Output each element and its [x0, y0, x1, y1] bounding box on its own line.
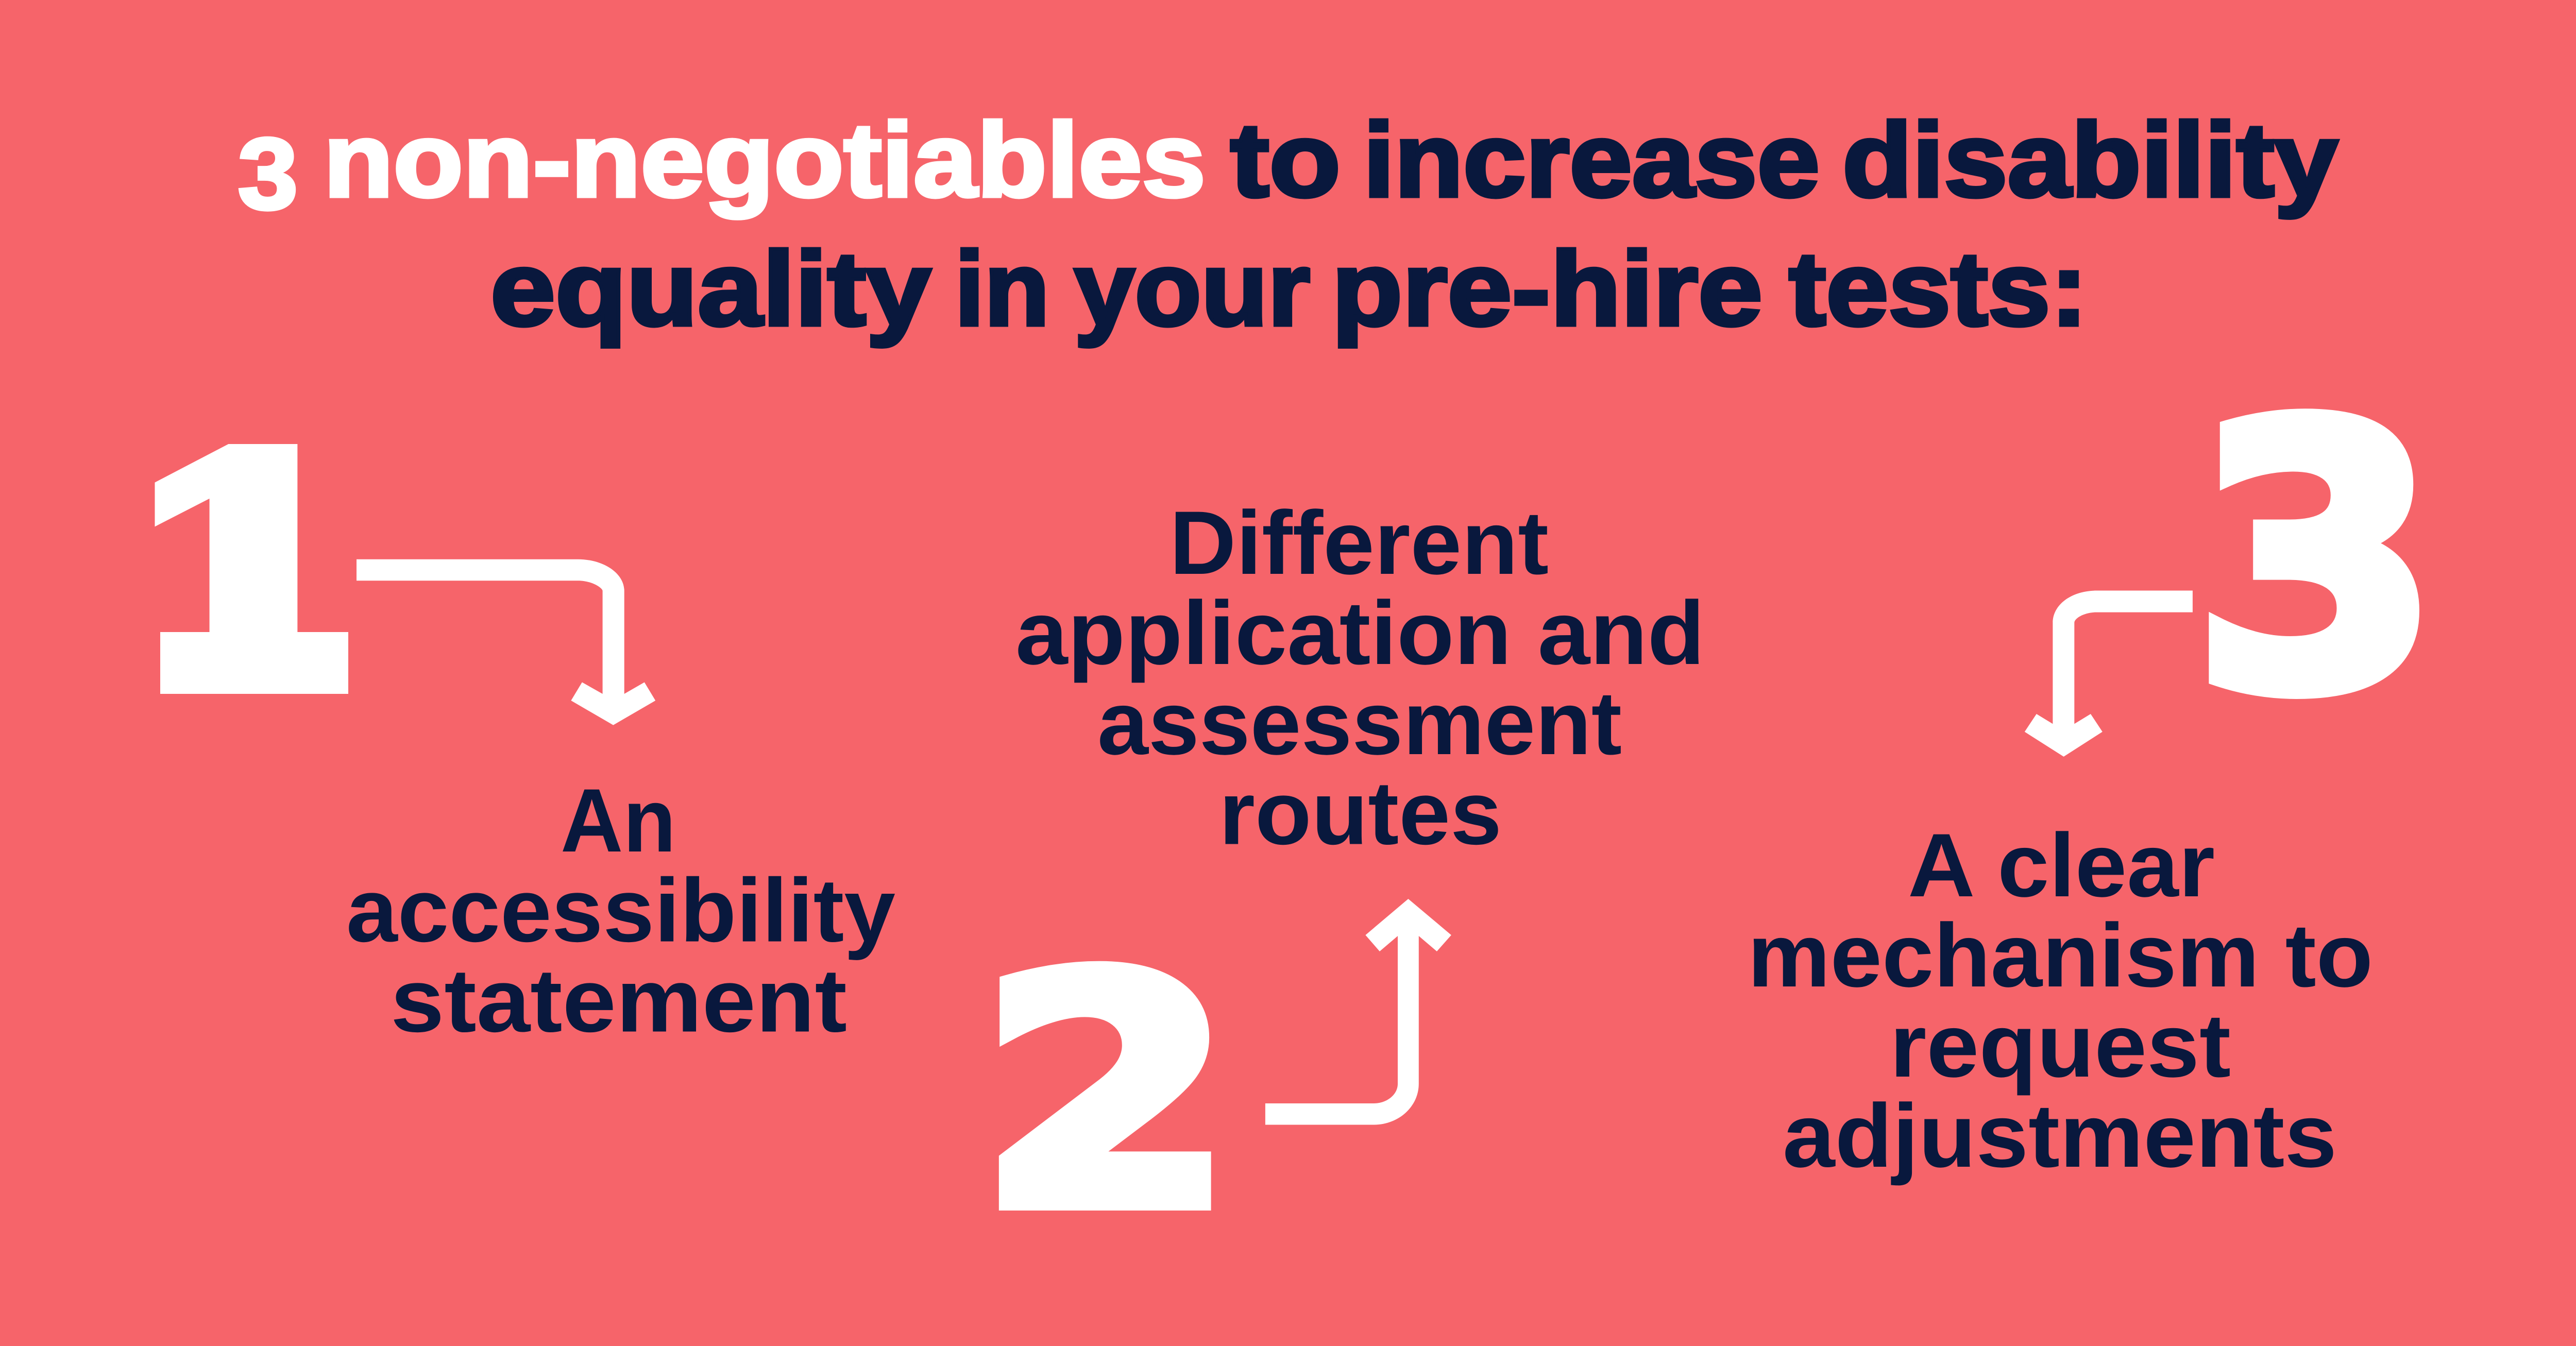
text block: a clear mechanism to request adjustments: request — [1890, 996, 2231, 1096]
text block: a clear mechanism to request adjustments: adjustments — [1783, 1086, 2337, 1186]
title line 2: tests: — [1789, 230, 2088, 348]
arrow from 3 down to adjustments — [2025, 590, 2193, 757]
text block: different application and assessment routes: assessment — [1097, 673, 1622, 774]
numeral 1: 1 — [122, 392, 372, 758]
text block: different application and assessment routes: application and — [1015, 583, 1705, 684]
title line 2: your — [1074, 230, 1310, 348]
title line 2 — [490, 230, 2088, 348]
text block: different application and assessment routes: routes — [1219, 763, 1502, 863]
title line 1 remainder — [1230, 101, 2338, 219]
title line 1 remainder: disability — [1842, 101, 2338, 219]
text block: a clear mechanism to request adjustments — [1748, 815, 2373, 1186]
numeral 2: 2 — [979, 911, 1234, 1277]
title line 1 remainder: to — [1230, 101, 1341, 219]
text block: a clear mechanism to request adjustments: A clear — [1908, 815, 2215, 916]
title line 2: in — [955, 230, 1049, 348]
title — [238, 101, 2338, 348]
title line 2: pre-hire — [1332, 230, 1762, 348]
numeral 3: 3 — [2193, 349, 2439, 771]
text block: an accessibility statement: An — [561, 771, 676, 871]
title accent: 3 non-negotiables: non-negotiables — [324, 101, 1206, 219]
title line 1 remainder: increase — [1363, 101, 1820, 219]
title accent: 3 non-negotiables: 3 — [238, 117, 298, 230]
title line 2: equality — [490, 230, 931, 348]
text block: an accessibility statement: accessibility — [346, 860, 895, 961]
arrow from 1 down to statement — [357, 559, 655, 725]
text block: different application and assessment routes: Different — [1170, 493, 1549, 593]
text block: a clear mechanism to request adjustments: mechanism to — [1748, 906, 2373, 1006]
text block: an accessibility statement: statement — [391, 951, 847, 1051]
text block: an accessibility statement — [346, 771, 895, 1051]
arrow from 2 up to routes — [1265, 899, 1451, 1125]
text block: different application and assessment routes — [1015, 493, 1705, 863]
